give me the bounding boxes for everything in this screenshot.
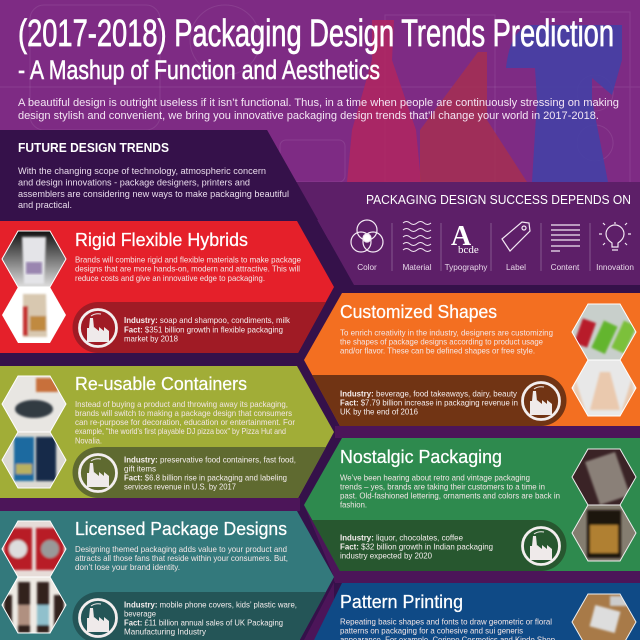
decorative red bottle (420, 52, 527, 182)
facts: Industry: liquor, chocolates, coffee (340, 534, 463, 542)
body text: reduce costs and give an innovative edge to packaging. (75, 274, 265, 283)
icon: label (502, 222, 530, 251)
facts: Industry: mobile phone covers, kids’ plastic ware, (124, 600, 297, 610)
body text: We’ve been hearing about retro and vintage packaging (340, 474, 530, 482)
fact strip (312, 375, 566, 426)
facts: Industry: preservative food containers, fast food, (124, 456, 296, 464)
icon: innovation (599, 222, 631, 250)
icon: factory (522, 528, 560, 564)
body text (340, 618, 555, 640)
panel: re-usable containers (0, 366, 334, 498)
blueprint outlines (0, 5, 640, 182)
facts (124, 316, 291, 344)
heading: success depends on: PACKAGING DESIGN SUCCESS DEPENDS ON (366, 193, 631, 207)
facts (340, 534, 493, 560)
panel: licensed package designs (0, 511, 334, 640)
purple band accents (0, 426, 640, 640)
fact strip (73, 447, 326, 498)
panel: packaging design success (296, 182, 640, 285)
body text: fashion. (340, 500, 367, 510)
fact strip (73, 302, 326, 353)
future trends text: and practical. (18, 200, 72, 211)
image hexagon (572, 594, 636, 640)
panel: pattern printing (314, 583, 640, 640)
heading: Customized Shapes (340, 301, 497, 322)
image hexagons (2, 376, 66, 488)
facts: Industry: soap and shampoo, condiments, milk (124, 316, 291, 325)
body text (340, 474, 560, 510)
body text: don’t lose your brand identity. (75, 563, 180, 572)
decorative pink bottle (347, 20, 421, 182)
facts: market by 2018 (124, 334, 178, 344)
image hexagons (2, 231, 66, 343)
body text: Repeating basic shapes and fonts to draw geometric or floral (340, 618, 552, 626)
facts: Fact: $7.79 billion increase in packaging revenue in (340, 398, 518, 408)
fact strip (73, 592, 326, 640)
image hexagons (572, 449, 636, 561)
icon: content (551, 225, 580, 251)
body text: trends – yes, brands are taking their customers to a time in (340, 482, 545, 492)
icon labels: Material (402, 263, 432, 272)
heading: Licensed Package Designs (75, 518, 287, 539)
body text (75, 256, 301, 283)
intro text: design stylish and convenient, we bring you innovative packaging design trends that’ll change your world in 2017-2018. (18, 110, 599, 122)
future trends text (18, 166, 289, 211)
facts: UK by the end of 2016 (340, 408, 418, 416)
panel: rigid flexible hybrids (0, 221, 334, 353)
body text: designs that are more hands-on, modern and attractive. This will (75, 264, 300, 274)
fact strip (312, 520, 566, 571)
image hexagons (572, 304, 637, 416)
header background (0, 0, 640, 240)
intro text: A beautiful design is outright useless if it isn’t functional. Thus, in a time when people are continuously stressing on making (18, 97, 619, 109)
body text (340, 328, 553, 356)
icon labels: Color (357, 263, 377, 272)
body text: and/or flavor. These can be defined shapes or free style. (340, 346, 535, 356)
icon: factory (80, 454, 116, 492)
heading: Rigid Flexible Hybrids (75, 229, 248, 250)
body text (75, 545, 288, 572)
intro text (18, 97, 619, 122)
icon labels (357, 263, 634, 272)
future trends text: and design innovations - package designers, printers and (18, 178, 250, 188)
icon: typography: bcde (458, 244, 479, 256)
heading: Re-usable Containers (75, 373, 247, 394)
icon labels: Innovation (596, 263, 634, 272)
future trends text: With the changing scope of technology, atmospheric concern (18, 166, 266, 177)
icon labels: Content (551, 263, 580, 272)
panel: future design trends (0, 130, 318, 220)
body text: past. Old-fashioned lettering, ornaments and colors are back in (340, 492, 560, 500)
facts (124, 456, 296, 492)
body text: Instead of buying a product and throwing away its packaging, (75, 400, 288, 409)
decorative blue spray bottle (506, 25, 622, 182)
icon: typography: A (451, 221, 472, 252)
body text: patterns on packaging for a cohesive and sui generis (340, 626, 523, 636)
icon: material (403, 222, 431, 252)
subtitle: - A Mashup of Function and Aesthetics (18, 55, 380, 85)
facts: Manufacturing Industry (124, 628, 207, 636)
body text: brands will switch to making a package design that consumers (75, 409, 292, 418)
icon: color (351, 220, 383, 252)
heading: Pattern Printing (340, 591, 463, 612)
facts: Fact: $351 billion growth in flexible packaging (124, 326, 283, 334)
icon labels: Typography (445, 263, 488, 272)
facts: Fact: $32 billion growth in Indian packaging (340, 542, 493, 552)
facts: Fact: $6.8 billion rise in packaging and labeling (124, 474, 287, 482)
lower dark background (0, 130, 640, 640)
body text: Brands will combine rigid and flexible materials to make package (75, 256, 301, 264)
image hexagons (2, 521, 66, 633)
facts: Fact: £11 billion annual sales of UK Packaging (124, 618, 283, 628)
icon: factory (80, 600, 116, 636)
heading: future design trends: FUTURE DESIGN TRENDS (18, 141, 169, 155)
icon: typography (451, 221, 479, 256)
body text: Designing themed packaging adds value to your product and (75, 545, 287, 554)
body text: can re-purpose for decoration, education or entertainment. For (75, 418, 295, 427)
facts (340, 390, 518, 416)
facts: beverage (124, 610, 156, 618)
dividers (392, 223, 590, 271)
body text: To enrich creativity in the industry, designers are customizing (340, 328, 553, 338)
panel: customized shapes (304, 293, 640, 426)
icon: factory (522, 382, 560, 420)
icon: factory (80, 310, 116, 346)
facts (124, 600, 297, 636)
body text: the shapes of package designs according to product usage (340, 338, 543, 346)
facts: Industry: beverage, food takeaways, dairy, beauty (340, 390, 518, 398)
facts: gift items (124, 464, 156, 474)
future trends text: assemblers are considering new ways to make packaging beautiful (18, 189, 289, 200)
panel: nostalgic packaging (304, 438, 640, 571)
body text: attracts all those fans that reside within your consumers. But, (75, 554, 288, 563)
body text (75, 400, 295, 446)
facts: services revenue in U.S. by 2017 (124, 482, 236, 492)
heading: Nostalgic Packaging (340, 446, 502, 467)
icon labels: Label (506, 263, 526, 272)
body text: Novalia. (75, 436, 102, 446)
facts: industry expected by 2020 (340, 552, 432, 560)
body text: example, "the world's first playable DJ pizza box" by Pizza Hut and (75, 427, 286, 436)
